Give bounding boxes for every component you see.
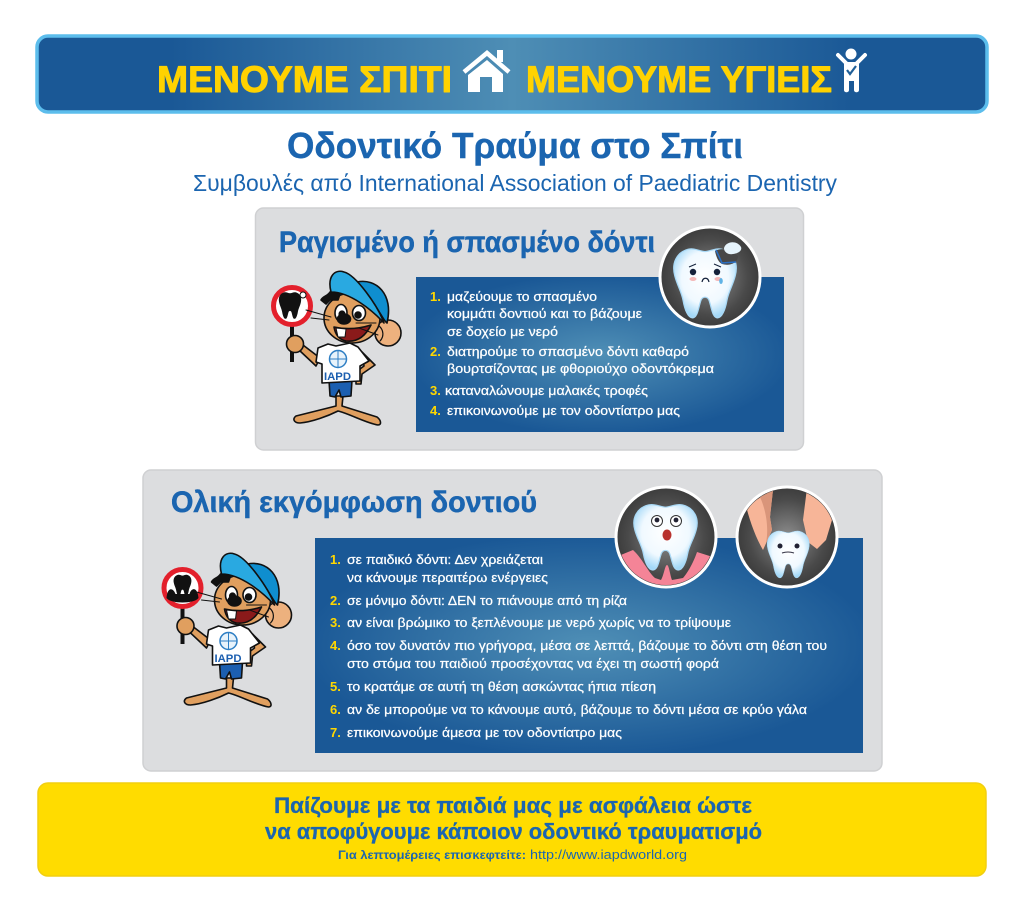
step 1: μαζεύουμε το σπασμένο	[447, 289, 597, 304]
mascot with tooth sign	[274, 271, 401, 425]
title: Οδοντικό Τραύμα στο Σπίτι	[287, 125, 743, 166]
step 6: αν δε μπορούμε να το κάνουμε αυτό, βάζουμε το δόντι μέσα σε κρύο γάλα	[347, 702, 808, 717]
mascot with avulsion sign	[164, 553, 292, 707]
step 5: 5.	[330, 679, 341, 694]
step 2: σε μόνιμο δόντι: ΔΕΝ το πιάνουμε από τη ρίζα	[347, 593, 628, 608]
step 2: 2.	[330, 593, 341, 608]
footer link line	[338, 847, 687, 862]
icon: chipped sad tooth	[660, 227, 760, 327]
panel: total avulsion of a tooth	[143, 470, 882, 771]
footer link line: Για λεπτομέρειες επισκεφτείτε:	[338, 848, 526, 862]
step 1: σε παιδικό δόντι: Δεν χρειάζεται	[347, 552, 543, 567]
step 4: στο στόμα του παιδιού προσέχοντας να έχει τη σωστή φορά	[347, 656, 720, 671]
step 4: 4.	[430, 403, 441, 418]
step 4: επικοινωνούμε με τον οδοντίατρο μας	[447, 403, 680, 418]
step 1: να κάνουμε περαιτέρω ενέργειες	[347, 570, 548, 585]
step 5: το κρατάμε σε αυτή τη θέση ασκώντας ήπια πίεση	[347, 679, 656, 694]
footer message	[265, 793, 762, 844]
step 2: βουρτσίζοντας με φθοριούχο οδοντόκρεμα	[447, 361, 715, 376]
step 6: 6.	[330, 702, 341, 717]
step 3: 3.	[330, 615, 341, 630]
icon: hands holding tooth	[737, 487, 837, 587]
top banner	[37, 36, 987, 112]
step 4	[330, 638, 827, 671]
step 7: 7.	[330, 725, 341, 740]
icon: knocked-out tooth above gum	[616, 487, 716, 590]
step 3: αν είναι βρώμικο το ξεπλένουμε με νερό χωρίς να το τρίψουμε	[347, 615, 731, 630]
step 4: όσο τον δυνατόν πιο γρήγορα, μέσα σε λεπτά, βάζουμε το δόντι στη θέση του	[347, 638, 827, 653]
step 2: διατηρούμε το σπασμένο δόντι καθαρό	[447, 344, 689, 359]
step 3: καταναλώνουμε μαλακές τροφές	[445, 383, 648, 398]
panel heading: Ραγισμένο ή σπασμένο δόντι	[279, 226, 655, 259]
step 1: 1.	[430, 289, 441, 304]
footer message: να αποφύγουμε κάποιον οδοντικό τραυματισμό	[265, 819, 762, 844]
step 1	[430, 289, 642, 339]
instructions box	[315, 538, 863, 753]
panel heading: Ολική εκγόμφωση δοντιού	[171, 486, 537, 519]
step 1: 1.	[330, 552, 341, 567]
step 7: επικοινωνούμε άμεσα με τον οδοντίατρο μας	[347, 725, 622, 740]
step 3: 3.	[430, 383, 441, 398]
step 1: κομμάτι δοντιού και το βάζουμε	[447, 306, 642, 321]
step 1: σε δοχείο με νερό	[447, 324, 558, 339]
mascot with tooth sign: IAPD	[324, 371, 351, 383]
subtitle: Συμβουλές από International Association of Paediatric Dentistry	[193, 170, 837, 196]
icon: healthy child	[838, 48, 865, 92]
icon: house	[464, 50, 509, 92]
footer link line: http://www.iapdworld.org	[530, 847, 687, 862]
step 2: 2.	[430, 344, 441, 359]
banner text: stay healthy: ΜΕΝΟΥΜΕ ΥΓΙΕΙΣ	[526, 58, 832, 100]
footer callout	[38, 783, 986, 876]
banner text: stay home: ΜΕΝΟΥΜΕ ΣΠΙΤΙ	[157, 58, 452, 100]
footer message: Παίζουμε με τα παιδιά μας με ασφάλεια ώστε	[274, 793, 753, 818]
step 2	[430, 344, 715, 376]
step 1	[330, 552, 548, 585]
panel: cracked or broken tooth	[256, 208, 804, 450]
step 4: 4.	[330, 638, 341, 653]
mascot with avulsion sign: IAPD	[214, 653, 242, 665]
instructions box	[416, 277, 784, 432]
